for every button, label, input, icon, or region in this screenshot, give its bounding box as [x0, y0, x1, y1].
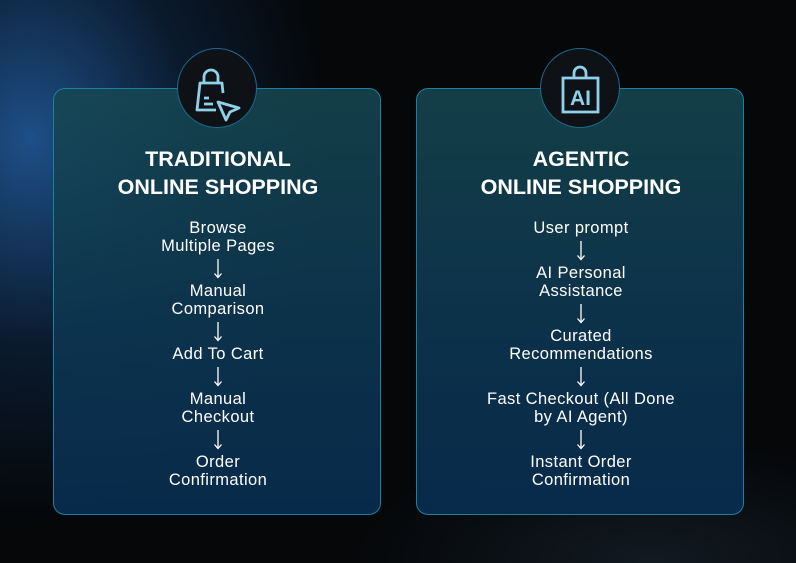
steps: agentic: Fast Checkout (All Done — [487, 390, 675, 408]
steps: agentic: AI Personal — [536, 264, 626, 282]
panel: traditional — [53, 88, 381, 515]
title: traditional: ONLINE SHOPPING — [118, 175, 318, 199]
title: traditional: TRADITIONAL — [145, 147, 291, 171]
icon: shopping bag with cursor — [177, 48, 257, 128]
steps: traditional: Manual — [190, 282, 246, 300]
title: agentic: ONLINE SHOPPING — [481, 175, 681, 199]
steps: agentic: Instant Order — [530, 453, 632, 471]
steps: traditional: Checkout — [182, 408, 254, 426]
title: traditional — [118, 147, 318, 199]
steps: traditional: Comparison — [172, 300, 264, 318]
steps: agentic: Curated — [550, 327, 612, 345]
steps: traditional: Order — [196, 453, 240, 471]
steps: agentic: Confirmation — [532, 471, 630, 489]
steps: traditional: Browse — [189, 219, 247, 237]
steps: traditional: Manual — [190, 390, 246, 408]
steps: agentic: Recommendations — [509, 345, 653, 363]
steps: traditional: Add To Cart — [172, 345, 264, 363]
steps: agentic — [487, 219, 675, 489]
steps: agentic: User prompt — [533, 219, 629, 237]
icon: AI bag: AI — [570, 86, 590, 110]
steps: agentic: Assistance — [539, 282, 623, 300]
panel: agentic — [416, 88, 744, 515]
steps: agentic: by AI Agent) — [534, 408, 628, 426]
steps: traditional: Multiple Pages — [161, 237, 275, 255]
icon: AI bag — [540, 48, 620, 128]
steps: traditional: Confirmation — [169, 471, 267, 489]
title: agentic — [481, 147, 681, 199]
title: agentic: AGENTIC — [533, 147, 629, 171]
steps: traditional — [161, 219, 275, 489]
